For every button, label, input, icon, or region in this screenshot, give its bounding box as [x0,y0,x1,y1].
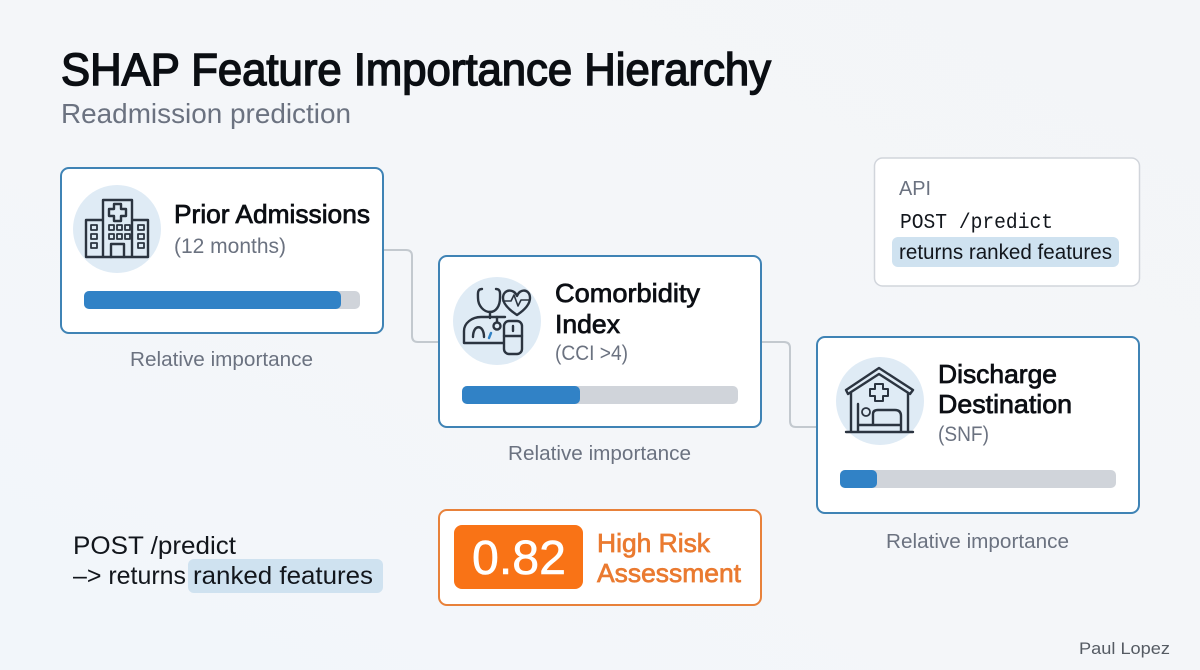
risk label: High Risk [597,528,711,558]
icon: hospital [73,185,161,273]
panel: discharge destination [817,337,1139,513]
heading: prior admissions: Prior Admissions [174,199,370,229]
text block: endpoint note: –> returns [73,562,186,590]
endpoint text: POST /predict [900,212,1053,235]
caption: relative importance 2: Relative importance [508,443,691,465]
bar: importance medium [462,386,738,404]
subtitle: Readmission prediction [61,98,351,129]
caption: relative importance 1: Relative importance [130,349,313,371]
caption: relative importance 3: Relative importance [886,531,1069,553]
note: SNF: (SNF) [938,423,989,446]
panel: comorbidity index [439,256,761,427]
title: SHAP Feature Importance Hierarchy [61,44,771,95]
heading: comorbidity index: Index [555,309,620,339]
heading: comorbidity index: Comorbidity [555,278,700,308]
connector: prior admissions to comorbidity [383,250,439,342]
heading: discharge destination [938,359,1072,419]
risk label: Assessment [597,558,742,588]
note: 12 months: (12 months) [174,235,286,258]
heading: discharge destination: Destination [938,389,1072,419]
heading: comorbidity index [555,278,700,339]
panel: API [874,158,1140,286]
connector: comorbidity to discharge [761,342,817,427]
note: CCI: (CCI >4) [555,342,628,365]
heading: discharge destination: Discharge [938,359,1057,389]
bar: importance low [840,470,1116,488]
icon: stethoscope and heart [453,277,541,365]
highlighted note: returns ranked features [899,241,1112,264]
bar: importance high [84,291,360,309]
text block: endpoint note [73,532,383,593]
score badge: 0.82 [472,532,566,585]
panel: risk score [439,510,761,605]
label: API: API [899,178,931,200]
icon: care home [836,357,924,445]
risk label [597,528,742,588]
text block: endpoint note: POST /predict [73,532,236,560]
score badge [454,525,583,589]
panel: prior admissions [61,168,383,333]
text block: endpoint note: ranked features [193,562,373,590]
author credit: Paul Lopez [1079,639,1170,658]
